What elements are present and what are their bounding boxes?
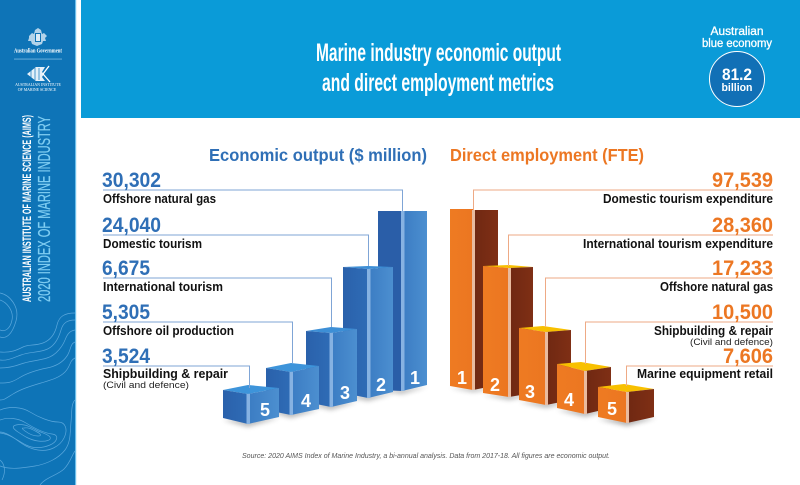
item 5: (Civil and defence) — [103, 380, 189, 390]
panel: header banner — [81, 0, 800, 118]
bar 2: 2 — [376, 375, 386, 395]
bar 5 — [223, 385, 279, 427]
item 1 — [603, 169, 773, 206]
sidebar title line 2: 2020 INDEX OF MARINE INDUSTRY — [34, 116, 54, 302]
bar 2 — [483, 265, 533, 400]
bar 2 — [343, 266, 393, 401]
item 4 — [654, 301, 773, 347]
item 5: 3,524 — [102, 345, 150, 368]
item 3: 6,675 — [102, 257, 150, 280]
bar 1: 1 — [410, 368, 420, 388]
item 4: Offshore oil production — [103, 323, 234, 338]
leader lines: economic output — [103, 190, 402, 388]
chart: economic output bars — [223, 211, 427, 427]
panel: left sidebar — [0, 0, 76, 485]
contour map pattern — [0, 293, 75, 485]
item 2: International tourism expenditure — [583, 236, 773, 251]
bar 1 — [450, 209, 498, 392]
heading: economic output: Economic output ($ million) — [209, 145, 427, 165]
bar 4 — [266, 363, 319, 418]
source note: Source: 2020 AIMS Index of Marine Industry, a bi-annual analysis. Data from 2017-18. All figures are economic output. — [242, 451, 610, 460]
bar 3: 3 — [340, 383, 350, 403]
AIMS label: OF MARINE SCIENCE — [18, 88, 57, 92]
item 2: Domestic tourism — [103, 236, 202, 251]
bar 3 — [306, 327, 357, 410]
Australian Government label: Australian Government — [14, 48, 62, 54]
item 4: (Civil and defence) — [690, 337, 773, 347]
item 5 — [637, 345, 773, 381]
bar 1 — [378, 211, 427, 394]
AIMS label: AUSTRALIAN INSTITUTE — [15, 83, 61, 87]
bar 5: 5 — [607, 399, 617, 419]
item 3: 17,233 — [712, 257, 773, 280]
heading: direct employment: Direct employment (FTE) — [450, 145, 644, 165]
item 2: 28,360 — [712, 214, 773, 237]
item 1: Domestic tourism expenditure — [603, 191, 773, 206]
item 1: 97,539 — [712, 169, 773, 192]
list: economic output labels — [102, 169, 234, 390]
callout: Australian blue economy: billion — [722, 82, 753, 94]
callout: Australian blue economy: blue economy — [702, 38, 772, 50]
bar 4: 4 — [564, 390, 574, 410]
item 5: Marine equipment retail — [637, 366, 773, 381]
bar 5: 5 — [260, 400, 270, 420]
item 5 — [102, 345, 228, 390]
callout: Australian blue economy — [702, 26, 772, 106]
list: direct employment labels — [583, 169, 773, 381]
item 2: 24,040 — [102, 214, 161, 237]
item 5: 7,606 — [723, 345, 773, 368]
bar 5 — [598, 384, 656, 426]
leader lines: direct employment — [474, 190, 773, 386]
item 3 — [660, 257, 773, 294]
bar 3 — [519, 326, 571, 408]
item 1: Offshore natural gas — [103, 191, 216, 206]
item 3: Offshore natural gas — [660, 279, 773, 294]
item 5: Shipbuilding & repair — [103, 366, 228, 381]
bar 2: 2 — [490, 375, 500, 395]
item 4: 10,500 — [712, 301, 773, 324]
chart: direct employment bars — [450, 209, 656, 426]
item 2 — [583, 214, 773, 251]
callout: Australian blue economy: 81.2 — [722, 65, 752, 84]
icon: Australian Government crest — [28, 28, 47, 46]
item 4 — [102, 301, 234, 338]
item 3: International tourism — [103, 279, 223, 294]
item 2 — [102, 214, 202, 251]
item 3 — [102, 257, 223, 294]
bar 4: 4 — [301, 391, 311, 411]
AIMS label — [15, 83, 61, 92]
title: Marine industry economic output — [316, 39, 561, 67]
icon: AIMS fish logo — [27, 66, 50, 82]
title — [316, 39, 561, 97]
bar 4 — [557, 362, 611, 417]
item 1 — [102, 169, 216, 206]
item 1: 30,302 — [102, 169, 161, 192]
item 4: 5,305 — [102, 301, 150, 324]
callout: Australian blue economy: Australian — [710, 26, 764, 38]
bar 1: 1 — [457, 368, 467, 388]
bar 3: 3 — [525, 382, 535, 402]
title: and direct employment metrics — [322, 69, 554, 97]
item 4: Shipbuilding & repair — [654, 323, 773, 338]
